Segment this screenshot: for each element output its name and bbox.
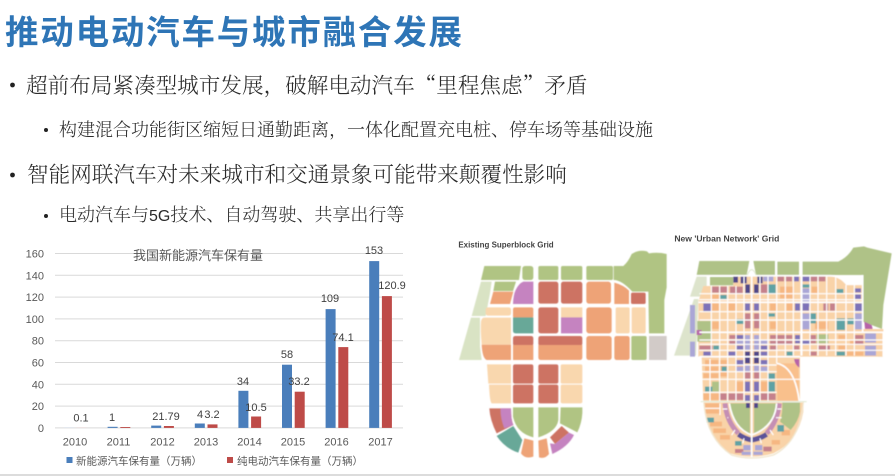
data labels: 120.9 xyxy=(378,280,406,292)
peach blocks xyxy=(481,307,646,403)
x axis labels: 2012 xyxy=(150,436,175,448)
green blocks xyxy=(481,251,667,437)
peach base xyxy=(698,277,883,457)
data labels: 21.79 xyxy=(152,411,180,423)
data labels: 0.1 xyxy=(73,412,89,424)
data labels: 74.1 xyxy=(332,332,354,344)
teal blocks xyxy=(497,317,533,453)
bullet text: compact city development: 超前布局紧凑型城市发展，破解电动汽车“里程焦虑”矛盾 xyxy=(26,69,587,100)
sub-bullet text: 5G and autonomous driving: 电动汽车与5G技术、自动驾驶、共享出行等 xyxy=(59,201,404,227)
magenta cells xyxy=(697,322,873,368)
data labels: 4 xyxy=(197,409,203,421)
orange cells xyxy=(703,287,863,445)
y axis labels: 80 xyxy=(32,336,44,348)
chart title: 我国新能源汽车保有量 xyxy=(133,248,263,263)
y axis labels: 60 xyxy=(32,358,44,370)
bullet text: connected vehicles: 智能网联汽车对未来城市和交通景象可能带来颠覆性影响 xyxy=(27,158,567,189)
x axis labels: 2010 xyxy=(63,436,87,448)
legend: 纯电动汽车保有量（万辆） xyxy=(237,454,363,468)
bottom rule xyxy=(0,474,895,476)
data labels: 10.5 xyxy=(245,402,267,414)
x axis labels: 2014 xyxy=(237,436,262,448)
data labels: 153 xyxy=(365,245,383,257)
bar chart: new energy vehicle stock xyxy=(26,245,406,468)
mid purple cells xyxy=(703,277,863,401)
teal cells xyxy=(705,284,854,446)
legend xyxy=(66,454,363,468)
legend: 新能源汽车保有量（万辆） xyxy=(76,454,202,468)
green areas xyxy=(697,246,892,329)
red bars xyxy=(77,296,392,428)
map title: Existing Superblock Grid xyxy=(458,240,554,250)
x axis labels: 2017 xyxy=(368,436,393,448)
title: 推动电动汽车与城市融合发展 xyxy=(5,15,462,52)
red blocks xyxy=(489,282,646,444)
blue bars xyxy=(64,261,379,428)
y axis labels: 140 xyxy=(26,270,44,282)
data labels: 109 xyxy=(321,293,339,305)
street grid xyxy=(697,261,883,463)
x axis labels: 2011 xyxy=(107,436,130,448)
x axis labels: 2016 xyxy=(324,436,349,448)
inner green of lower ring xyxy=(697,321,828,434)
y axis labels: 40 xyxy=(32,379,44,391)
data labels: 58 xyxy=(281,349,293,361)
pale green blocks xyxy=(459,282,492,360)
data labels: 1 xyxy=(109,412,115,424)
pale green areas xyxy=(674,277,883,357)
sub-bullet text: mixed-use blocks: 构建混合功能街区缩短日通勤距离，一体化配置充电桩、停车场等基础设施 xyxy=(59,116,653,142)
purple ring of cells around the park xyxy=(725,403,779,440)
y axis labels: 20 xyxy=(32,401,44,413)
data labels: 33.2 xyxy=(288,376,310,388)
y axis labels: 120 xyxy=(26,292,44,304)
x axis labels: 2013 xyxy=(194,436,218,448)
dark purple cells xyxy=(733,277,763,408)
y axis labels xyxy=(26,248,44,435)
x axis labels: 2015 xyxy=(281,436,305,448)
y axis labels: 100 xyxy=(26,314,44,326)
y axis labels: 0 xyxy=(38,423,44,435)
map: existing superblock grid xyxy=(458,240,667,458)
data labels: 3.2 xyxy=(204,409,220,421)
mauve cells xyxy=(699,277,863,453)
data labels: 34 xyxy=(237,376,249,388)
map: new urban network grid xyxy=(674,234,892,463)
data labels xyxy=(73,245,406,424)
map title: New 'Urban Network' Grid xyxy=(674,234,779,244)
gray block xyxy=(649,336,667,360)
y axis labels: 160 xyxy=(26,248,44,260)
x axis labels xyxy=(63,436,393,448)
orange blocks xyxy=(482,282,630,458)
purple blocks xyxy=(501,282,582,454)
light purple cells xyxy=(690,277,876,455)
